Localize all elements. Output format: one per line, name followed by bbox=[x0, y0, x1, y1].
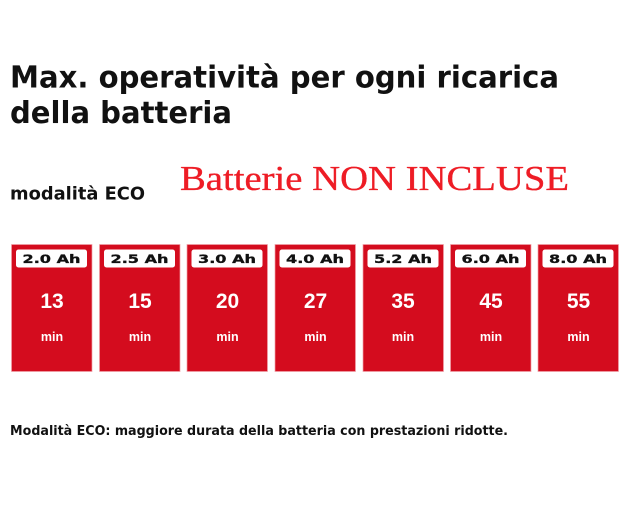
card: 5.2 Ah: 35 bbox=[391, 290, 415, 313]
card: 2.5 Ah: 2.5 Ah bbox=[110, 252, 168, 266]
card: 2.0 Ah: 13 bbox=[40, 290, 64, 313]
card: 5.2 Ah: 5.2 Ah bbox=[374, 252, 432, 266]
card: 3.0 Ah: 20 bbox=[216, 290, 239, 313]
card: 2.5 Ah bbox=[100, 244, 180, 372]
card: 4.0 Ah bbox=[275, 244, 356, 372]
battery cards bbox=[12, 244, 618, 372]
card: 8.0 Ah bbox=[538, 244, 618, 372]
card: 8.0 Ah: 55 bbox=[567, 290, 590, 313]
title bbox=[10, 60, 559, 131]
card: 4.0 Ah: 4.0 Ah bbox=[286, 252, 344, 266]
card: 5.2 Ah bbox=[363, 244, 444, 372]
card: 2.0 Ah bbox=[12, 244, 92, 372]
footnote: Modalità ECO: maggiore durata della batteria con prestazioni ridotte. bbox=[10, 423, 508, 439]
subtitle: modalità ECO: modalità ECO bbox=[10, 184, 145, 204]
card: 3.0 Ah: min bbox=[216, 330, 239, 344]
card: 2.0 Ah: min bbox=[41, 330, 63, 344]
card: 6.0 Ah: 6.0 Ah bbox=[462, 252, 520, 266]
card: 6.0 Ah: 45 bbox=[479, 290, 503, 313]
title: della batteria bbox=[10, 96, 232, 131]
notice: Batterie NON INCLUSE: Batterie NON INCLUSE bbox=[180, 159, 569, 198]
card: 8.0 Ah: 8.0 Ah bbox=[549, 252, 607, 266]
card: 4.0 Ah: min bbox=[304, 330, 327, 344]
card: 6.0 Ah bbox=[450, 244, 531, 372]
card: 2.5 Ah: min bbox=[129, 330, 151, 344]
card: 2.5 Ah: 15 bbox=[128, 290, 152, 313]
title: Max. operatività per ogni ricarica bbox=[10, 60, 559, 96]
card: 8.0 Ah: min bbox=[567, 330, 590, 344]
card: 5.2 Ah: min bbox=[392, 330, 414, 344]
card: 3.0 Ah: 3.0 Ah bbox=[198, 252, 256, 266]
card: 3.0 Ah bbox=[187, 244, 268, 372]
card: 4.0 Ah: 27 bbox=[304, 290, 327, 313]
card: 6.0 Ah: min bbox=[480, 330, 502, 344]
card: 2.0 Ah: 2.0 Ah bbox=[22, 252, 80, 266]
